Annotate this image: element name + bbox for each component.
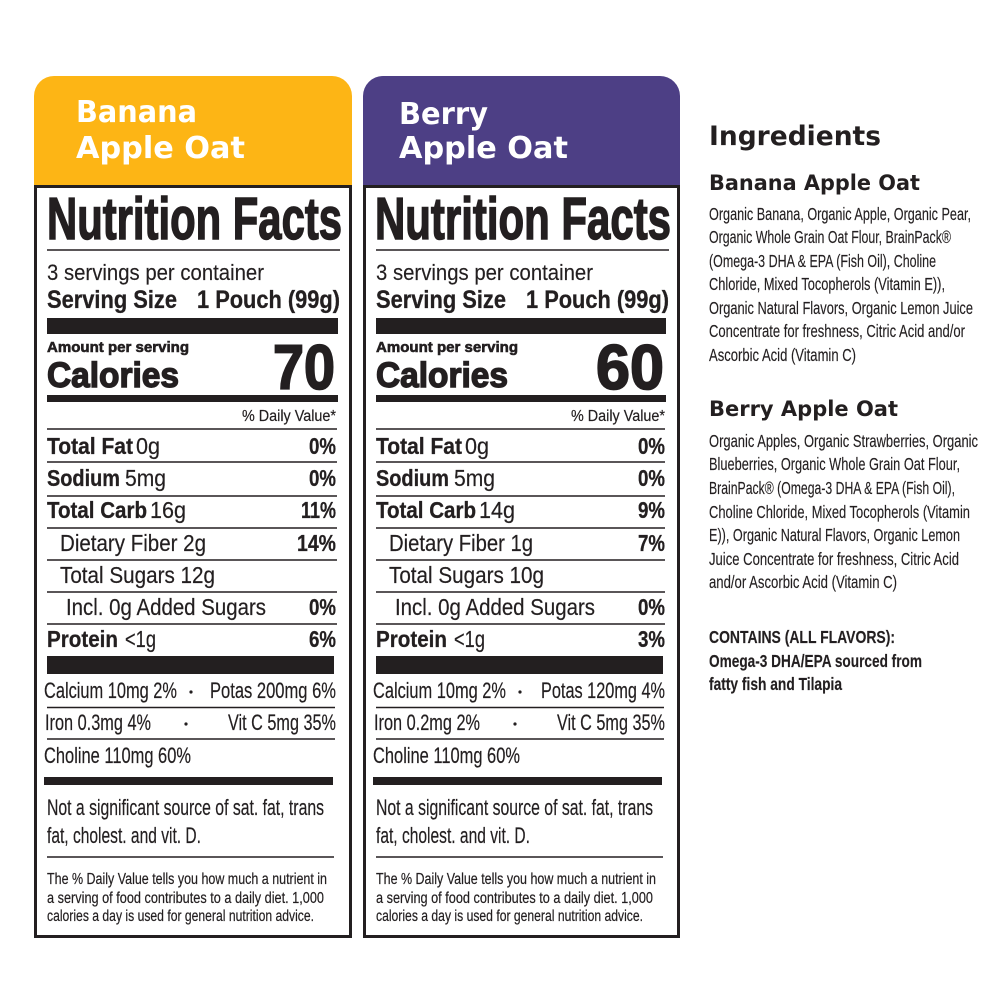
heading: nutrition facts: Nutrition Facts <box>47 186 342 252</box>
row: total carb: 14g <box>479 497 515 523</box>
servings info: Serving Size <box>376 286 506 314</box>
footnote: daily value <box>47 871 327 925</box>
row: dietary fiber: 7% <box>638 530 665 556</box>
row: total fat <box>47 433 336 459</box>
note: not a significant source <box>376 795 653 848</box>
daily value heading: % Daily Value* <box>571 408 665 425</box>
row: protein: <1g <box>454 626 485 652</box>
row: total fat: 0g <box>465 433 489 459</box>
note: not a significant source: fat, cholest. and vit. D. <box>376 823 530 848</box>
row: calcium and potassium: Potas 120mg 4% <box>541 678 665 703</box>
row: protein: 3% <box>638 626 665 652</box>
row: total carb: Total Carb <box>376 497 476 523</box>
servings info: 1 Pouch (99g) <box>197 286 340 314</box>
row: iron and vitamin c: Iron 0.3mg 4% <box>45 710 151 735</box>
heading: ingredients: Ingredients <box>709 121 881 152</box>
footnote: daily value: a serving of food contributes to a daily diet. 1,000 <box>47 890 324 907</box>
calories block <box>47 333 335 403</box>
row: protein: 6% <box>309 626 336 652</box>
calories block: 70 <box>273 333 335 403</box>
row: total fat: Total Fat <box>376 433 462 459</box>
row: iron and vitamin c <box>45 710 336 735</box>
ingredient list: berry apple oat: and/or Ascorbic Acid (Vitamin C) <box>709 572 897 592</box>
header: banana apple oat: Apple Oat <box>76 131 245 166</box>
servings info: 3 servings per container <box>47 260 264 285</box>
row: sodium: 0% <box>309 465 336 491</box>
row: sodium: Sodium <box>376 465 449 491</box>
ingredient list: banana apple oat: Ascorbic Acid (Vitamin C) <box>709 345 856 365</box>
row: dietary fiber: Dietary Fiber 2g <box>60 530 206 556</box>
footnote: daily value: a serving of food contributes to a daily diet. 1,000 <box>376 890 653 907</box>
footnote: daily value: calories a day is used for general nutrition advice. <box>47 908 314 925</box>
row: protein: Protein <box>376 626 447 652</box>
calories block: Amount per serving <box>376 339 518 356</box>
panel: banana apple oat nutrition label <box>34 76 352 936</box>
row: added sugars: Incl. 0g Added Sugars <box>395 594 595 620</box>
row: dietary fiber: Dietary Fiber 1g <box>389 530 533 556</box>
row: protein: <1g <box>125 626 156 652</box>
row: total carb: Total Carb <box>47 497 147 523</box>
nutrition label box <box>364 186 678 936</box>
calories block: Calories <box>376 356 508 395</box>
servings info: 3 servings per container <box>376 260 593 285</box>
note: not a significant source: Not a significant source of sat. fat, trans <box>376 795 653 820</box>
row: choline: Choline 110mg 60% <box>373 743 520 768</box>
row: total carb: 9% <box>638 497 665 523</box>
row: total sugars: Total Sugars 10g <box>389 562 544 588</box>
panel: ingredients column <box>709 121 978 694</box>
row: calcium and potassium: Potas 200mg 6% <box>210 678 336 703</box>
row: protein: Protein <box>47 626 118 652</box>
footnote: daily value: The % Daily Value tells you how much a nutrient in <box>376 871 656 888</box>
row: protein <box>47 626 336 652</box>
daily value heading: % Daily Value* <box>242 408 336 425</box>
calories block: Amount per serving <box>47 339 189 356</box>
row: iron and vitamin c: Iron 0.2mg 2% <box>374 710 480 735</box>
row: total carb: 11% <box>301 497 336 523</box>
row: calcium and potassium <box>373 678 665 703</box>
header: banana apple oat: Banana <box>76 95 197 130</box>
ingredient list: banana apple oat <box>709 204 973 365</box>
allergen statement: CONTAINS (ALL FLAVORS): <box>709 627 895 647</box>
row: added sugars: Incl. 0g Added Sugars <box>66 594 266 620</box>
row: added sugars: 0% <box>638 594 665 620</box>
nutrition label box <box>36 186 350 936</box>
ingredient list: berry apple oat <box>709 431 978 592</box>
row: total fat: 0g <box>136 433 160 459</box>
servings info: 1 Pouch (99g) <box>526 286 669 314</box>
row: dietary fiber <box>389 530 665 556</box>
row: total fat: Total Fat <box>47 433 133 459</box>
allergen statement: Omega-3 DHA/EPA sourced from <box>709 651 922 671</box>
row: iron and vitamin c: Vit C 5mg 35% <box>557 710 665 735</box>
row: total carb: 16g <box>150 497 186 523</box>
row: calcium and potassium <box>44 678 336 703</box>
note: not a significant source: fat, cholest. and vit. D. <box>47 823 201 848</box>
row: total fat <box>376 433 665 459</box>
row: sodium <box>376 465 665 491</box>
row: sodium: Sodium <box>47 465 120 491</box>
row: sodium <box>47 465 336 491</box>
calories block <box>376 333 664 403</box>
row: sodium: 5mg <box>454 465 495 491</box>
calories block: 60 <box>596 333 664 403</box>
row: added sugars: 0% <box>309 594 336 620</box>
row: sodium: 5mg <box>125 465 166 491</box>
servings info <box>47 260 340 314</box>
footnote: daily value <box>376 871 656 925</box>
servings info <box>376 260 669 314</box>
row: total carb <box>376 497 665 523</box>
row: calcium and potassium: Calcium 10mg 2% <box>44 678 177 703</box>
subheading: banana apple oat: Banana Apple Oat <box>709 171 920 195</box>
row: total sugars: Total Sugars 12g <box>60 562 215 588</box>
row: total carb <box>47 497 336 523</box>
footnote: daily value: The % Daily Value tells you how much a nutrient in <box>47 871 327 888</box>
row: iron and vitamin c <box>374 710 665 735</box>
note: not a significant source: Not a significant source of sat. fat, trans <box>47 795 324 820</box>
footnote: daily value: calories a day is used for general nutrition advice. <box>376 908 643 925</box>
header: berry apple oat: Berry <box>399 97 488 132</box>
row: total fat: 0% <box>638 433 665 459</box>
header: berry apple oat: Apple Oat <box>399 131 568 166</box>
note: not a significant source <box>47 795 324 848</box>
servings info: Serving Size <box>47 286 177 314</box>
row: protein <box>376 626 665 652</box>
row: sodium: 0% <box>638 465 665 491</box>
header: berry apple oat <box>363 76 680 186</box>
row: iron and vitamin c: Vit C 5mg 35% <box>228 710 336 735</box>
row: dietary fiber <box>60 530 336 556</box>
calories block: Calories <box>47 356 179 395</box>
row: calcium and potassium: Calcium 10mg 2% <box>373 678 506 703</box>
allergen statement: fatty fish and Tilapia <box>709 674 842 694</box>
panel: berry apple oat nutrition label <box>363 76 680 936</box>
header: banana apple oat <box>34 76 352 186</box>
allergen statement <box>709 627 922 694</box>
subheading: berry apple oat: Berry Apple Oat <box>709 397 898 421</box>
row: total fat: 0% <box>309 433 336 459</box>
heading: nutrition facts: Nutrition Facts <box>375 186 671 252</box>
row: choline: Choline 110mg 60% <box>44 743 191 768</box>
row: dietary fiber: 14% <box>297 530 336 556</box>
